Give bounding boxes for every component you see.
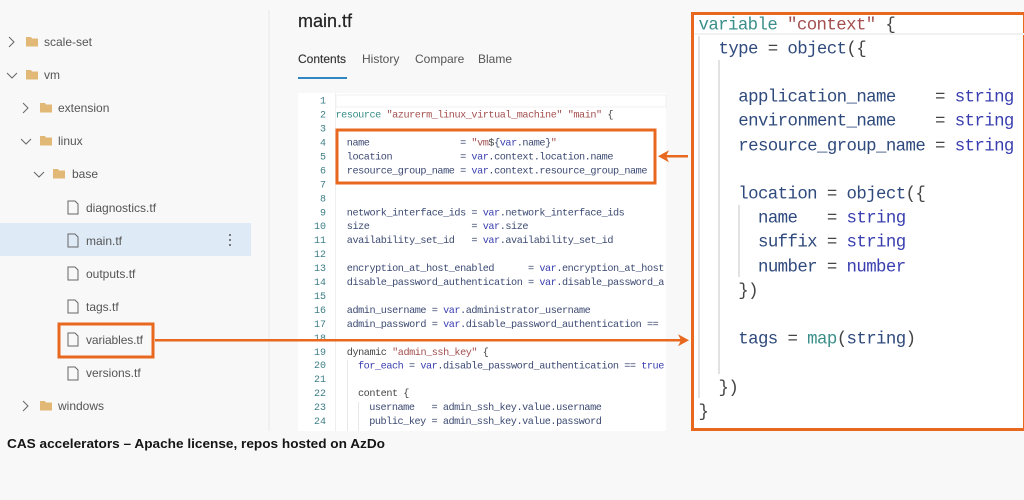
code lines: name = "vm${var.name}"	[347, 138, 556, 150]
code lines: username = admin_ssh_key.value.username	[369, 402, 602, 414]
tree row: windows: windows	[57, 399, 104, 413]
code: variable context: environment_name = string	[738, 112, 1014, 132]
tree row: scale-set	[9, 35, 93, 49]
line numbers: 5	[320, 152, 326, 164]
panel: code viewer	[298, 93, 666, 431]
code: variable context: application_name = string	[738, 88, 1014, 108]
code: variable context: number = number	[758, 258, 906, 278]
tabs: History	[362, 52, 399, 66]
code lines: admin_password = var.disable_password_authentication ==	[347, 319, 659, 331]
tree row: main.tf	[68, 234, 231, 248]
tree row: linux	[21, 134, 83, 148]
code: variable context: })	[738, 282, 758, 302]
tabs: Compare	[415, 52, 465, 66]
panel: context variable code	[692, 14, 1024, 430]
code lines	[336, 110, 664, 428]
tree row: versions.tf: versions.tf	[86, 366, 141, 380]
line numbers: 20	[314, 361, 326, 372]
code lines: admin_username = var.administrator_username	[347, 305, 591, 317]
code: variable context: type = object({	[718, 40, 866, 60]
line numbers	[314, 96, 326, 428]
code: variable context: tags = map(string)	[738, 330, 915, 350]
panel: file tree	[0, 35, 251, 413]
code lines: for_each = var.disable_password_authentication == true	[358, 360, 664, 372]
arrow: variables.tf to context variable	[155, 334, 689, 346]
line numbers: 3	[320, 124, 326, 136]
code lines: encryption_at_host_enabled = var.encryption_at_host	[347, 263, 664, 275]
tree row: main.tf: main.tf	[86, 234, 123, 248]
tree row: base	[34, 167, 98, 181]
code: variable context: name = string	[758, 210, 906, 228]
tree row: base: base	[72, 167, 98, 181]
line numbers: 13	[314, 264, 326, 275]
line numbers: 24	[314, 417, 326, 428]
tree row: tags.tf	[68, 300, 119, 314]
tree row: extension	[23, 101, 109, 115]
highlight box: name, location, resource group lines	[337, 130, 655, 183]
tree row: outputs.tf: outputs.tf	[86, 267, 136, 281]
code lines: dynamic "admin_ssh_key" {	[347, 347, 489, 359]
line numbers: 23	[314, 403, 326, 414]
tree row: windows	[23, 399, 104, 413]
tree row: scale-set: scale-set	[44, 35, 93, 49]
line numbers: 9	[320, 208, 326, 220]
line numbers: 11	[314, 236, 326, 247]
line numbers: 7	[320, 180, 326, 192]
tree row: variables.tf: variables.tf	[86, 333, 144, 347]
line numbers: 18	[314, 334, 326, 345]
tabs: Contents	[298, 52, 346, 66]
code: variable context: suffix = string	[758, 234, 906, 252]
code lines: resource "azurerm_linux_virtual_machine" "main" {	[336, 110, 613, 122]
tree row: diagnostics.tf: diagnostics.tf	[86, 201, 157, 215]
code lines: disable_password_authentication = var.disable_password_a	[347, 277, 664, 289]
highlight box: variables.tf	[59, 324, 153, 357]
tree row: vm: vm	[44, 68, 60, 82]
line numbers: 17	[314, 320, 326, 331]
heading: main.tf: main.tf	[298, 11, 353, 31]
line numbers: 8	[320, 194, 326, 206]
arrow: context variable to code block	[658, 150, 688, 162]
line numbers: 21	[314, 375, 326, 386]
line numbers: 10	[314, 222, 326, 233]
line numbers: 16	[314, 306, 326, 317]
code: variable context: variable "context" {	[698, 16, 895, 36]
code lines: public_key = admin_ssh_key.value.password	[369, 416, 602, 428]
tree row: vm	[7, 68, 60, 82]
code lines: size = var.size	[347, 221, 528, 233]
line numbers: 4	[320, 138, 326, 150]
line numbers: 12	[314, 250, 326, 261]
line numbers: 2	[320, 110, 326, 122]
code: variable context	[698, 16, 1014, 422]
code lines: network_interface_ids = var.network_interface_ids	[347, 208, 625, 220]
code lines: resource_group_name = var.context.resource_group_name	[347, 166, 647, 178]
line numbers: 15	[314, 292, 326, 303]
code lines: content {	[358, 388, 409, 400]
line numbers: 6	[320, 166, 326, 178]
line numbers: 14	[314, 278, 326, 289]
code: variable context: location = object({	[738, 186, 925, 204]
tree row: extension: extension	[58, 101, 109, 115]
tabs	[298, 52, 512, 79]
tree row: tags.tf: tags.tf	[86, 300, 119, 314]
code lines: availability_set_id = var.availability_set_id	[347, 235, 613, 247]
line numbers: 19	[314, 348, 326, 359]
tree row: linux: linux	[58, 134, 83, 148]
tabs: Blame	[478, 52, 512, 66]
code: variable context: })	[718, 380, 738, 398]
code: variable context: }	[698, 404, 708, 422]
line numbers: 1	[320, 96, 326, 108]
code: variable context: resource_group_name = string	[738, 138, 1014, 156]
code lines: location = var.context.location.name	[347, 152, 613, 164]
caption: CAS accelerators – Apache license, repos hosted on AzDo	[7, 436, 385, 451]
line numbers: 22	[314, 389, 326, 400]
